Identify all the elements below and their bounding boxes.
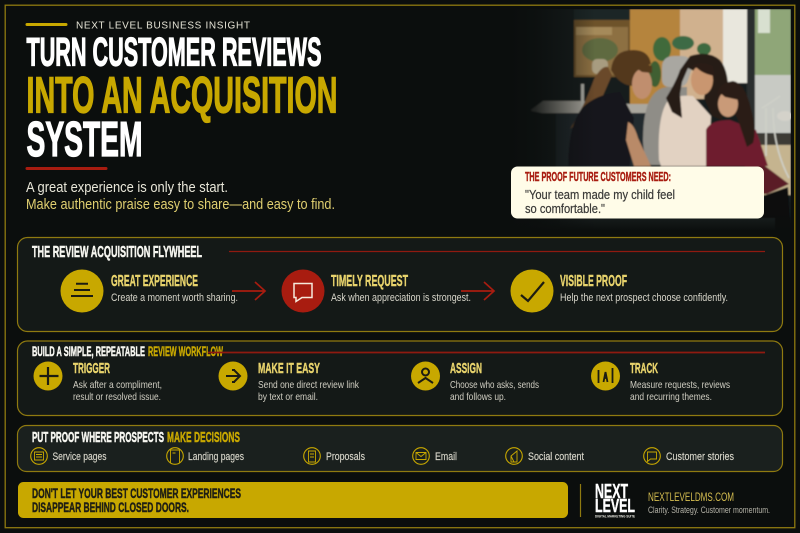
step: trigger: TRIGGER — [73, 361, 110, 377]
step: trigger — [34, 361, 162, 403]
step: assign — [411, 361, 539, 403]
step: make it easy: by text or email. — [258, 392, 318, 403]
placement heading: MAKE DECISIONS — [167, 430, 240, 446]
photo: dental visit with clinician, mother and child — [531, 9, 791, 224]
callout: customer quote: so comfortable." — [525, 202, 605, 216]
subtitle: A great experience is only the start. — [26, 179, 228, 196]
call to action banner: DISAPPEAR BEHIND CLOSED DOORS. — [32, 500, 189, 515]
item: customer stories: Customer stories — [666, 451, 734, 463]
callout: customer quote: THE PROOF FUTURE CUSTOMERS NEED: — [525, 170, 671, 184]
step: trigger: Ask after a compliment, — [73, 380, 162, 391]
step: assign: and follows up. — [450, 392, 506, 403]
item: email: Email — [435, 451, 457, 463]
step: visible proof: VISIBLE PROOF — [560, 273, 627, 290]
step: timely request: TIMELY REQUEST — [331, 273, 408, 290]
child — [706, 120, 768, 166]
step: timely request — [282, 270, 471, 312]
item: proposals: Proposals — [326, 451, 365, 463]
subtitle — [26, 179, 335, 213]
logo: Next Level: LEVEL — [595, 496, 635, 516]
item: social content: Social content — [528, 451, 584, 463]
step: visible proof — [510, 270, 728, 312]
callout: customer quote: "Your team made my child feel — [525, 188, 675, 202]
title: SYSTEM — [26, 113, 142, 167]
arrow — [461, 282, 494, 300]
step: track — [591, 361, 730, 403]
step: track: and recurring themes. — [630, 392, 712, 403]
step: trigger: result or resolved issue. — [73, 392, 161, 403]
step: assign: Choose who asks, sends — [450, 380, 539, 391]
step: visible proof: Help the next prospect choose confidently. — [560, 292, 728, 304]
step: assign: ASSIGN — [450, 361, 482, 377]
panel: review workflow — [18, 341, 782, 416]
step: great experience — [60, 270, 238, 312]
step: timely request: Ask when appreciation is strongest. — [331, 292, 471, 304]
title: TURN CUSTOMER REVIEWS — [26, 30, 322, 74]
call to action banner: DON'T LET YOUR BEST CUSTOMER EXPERIENCES — [32, 486, 241, 501]
title — [26, 30, 338, 167]
placement heading: PUT PROOF WHERE PROSPECTS — [32, 430, 164, 446]
mother — [659, 96, 711, 166]
step: track: TRACK — [630, 361, 658, 377]
subtitle: Make authentic praise easy to share—and easy to find. — [26, 196, 335, 213]
logo: Next Level: DIGITAL MARKETING SUITE — [595, 514, 635, 518]
callout: customer quote — [511, 166, 764, 218]
contact text: NEXTLEVELDMS.COM — [648, 492, 734, 504]
logo: Next Level — [595, 481, 635, 518]
call to action banner — [18, 482, 568, 518]
header text block — [26, 20, 338, 213]
eyebrow: NEXT LEVEL BUSINESS INSIGHT — [76, 20, 250, 31]
panel: where to put proof — [18, 426, 782, 472]
step: great experience: Create a moment worth sharing. — [111, 292, 238, 304]
workflow heading: REVIEW WORKFLOW — [148, 344, 223, 359]
contact text — [648, 492, 770, 516]
item: social content — [506, 448, 584, 464]
step: make it easy: MAKE IT EASY — [258, 361, 320, 377]
step: make it easy — [218, 361, 360, 403]
item: landing pages — [167, 448, 244, 464]
workflow heading: BUILD A SIMPLE, REPEATABLE — [32, 344, 145, 359]
clinician — [570, 67, 612, 129]
item: email — [413, 448, 457, 464]
red accent rule — [27, 167, 106, 170]
item: service pages: Service pages — [52, 451, 106, 463]
step: track: Measure requests, reviews — [630, 380, 730, 391]
logo: Next Level: NEXT — [595, 481, 628, 503]
item: landing pages: Landing pages — [188, 451, 244, 463]
arrow — [232, 282, 265, 300]
item: service pages — [31, 448, 107, 464]
title: INTO AN ACQUISITION — [26, 66, 338, 124]
step: great experience: GREAT EXPERIENCE — [111, 273, 198, 290]
panel: review acquisition flywheel — [18, 238, 782, 332]
step: make it easy: Send one direct review link — [258, 380, 360, 391]
flywheel heading: THE REVIEW ACQUISITION FLYWHEEL — [32, 244, 202, 261]
item: customer stories — [644, 448, 734, 464]
item: proposals — [304, 448, 365, 464]
